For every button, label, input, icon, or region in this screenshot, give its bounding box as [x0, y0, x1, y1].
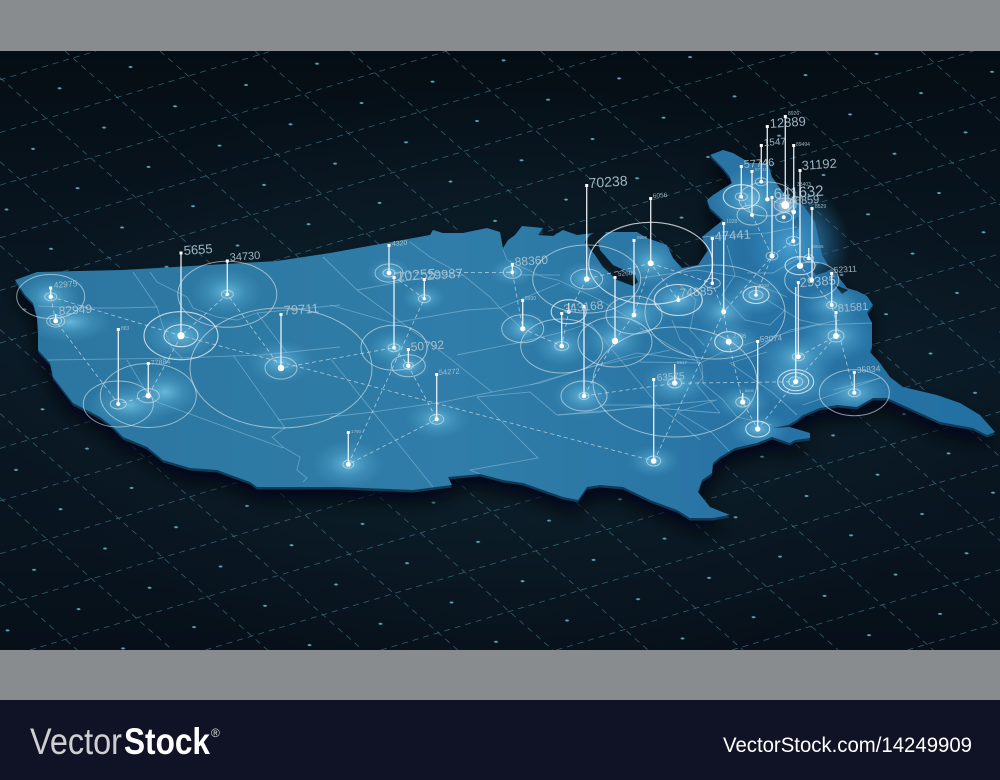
point 70238 [533, 172, 641, 313]
point 8917 [593, 327, 757, 437]
point 70238: 70238 [588, 172, 628, 191]
point 79711 [190, 301, 372, 428]
point 47441: 47441 [714, 227, 751, 244]
point 57746 [723, 157, 775, 209]
point 54272 [430, 367, 460, 424]
point 8529 [785, 204, 839, 298]
point 1790: 1790 [351, 429, 362, 434]
point 52311: 52311 [833, 263, 857, 275]
point 38403 [776, 182, 811, 222]
bottom grey band [0, 650, 1000, 700]
point 46859: 46859 [788, 194, 820, 208]
point 8926 inner ring [739, 182, 796, 216]
northeast glow [734, 183, 850, 307]
point 63575: 63575 [656, 371, 685, 384]
dashed network connections [51, 197, 854, 464]
point 2786: 2786 [733, 334, 747, 340]
point 53074: 53074 [760, 333, 783, 344]
point 74885 [654, 284, 714, 316]
point 60045: 60045 [811, 244, 824, 249]
point 10255: 10255 [396, 265, 436, 284]
point 8520 [743, 283, 770, 304]
point 53074 [746, 333, 783, 437]
map glow spots [20, 166, 894, 488]
point 89494: 89494 [796, 142, 810, 148]
point 12889 [765, 114, 806, 202]
point 82949 [47, 302, 93, 327]
point 81581 [828, 301, 869, 342]
map of the United States [15, 150, 995, 520]
point 47441 [704, 227, 751, 288]
point 29987: 29987 [426, 266, 463, 283]
point 8520: 8520 [759, 283, 770, 288]
coastal inlets [792, 216, 848, 294]
footer bar [0, 700, 1000, 780]
point 8926 [777, 111, 799, 213]
point 63575 [647, 371, 685, 466]
top grey band [0, 0, 1000, 51]
point 343168: 343168 [563, 298, 604, 316]
point 35834: 35834 [856, 363, 881, 375]
point 57746: 57746 [743, 157, 775, 171]
point 81581: 81581 [837, 301, 869, 315]
point 77884: 77884 [151, 359, 171, 367]
point 8917: 8917 [677, 360, 688, 365]
point lower middle ring [561, 305, 607, 411]
point 60045 [804, 244, 824, 262]
point 82949: 82949 [58, 302, 93, 318]
point 79711: 79711 [283, 301, 319, 318]
point 38403: 38403 [797, 182, 811, 188]
logo [30, 721, 220, 762]
point 8909: 8909 [637, 235, 648, 240]
point 641632: 641632 [773, 183, 824, 203]
point 343168 [551, 298, 604, 324]
stock image url: VectorStock.com/14249909 [723, 734, 972, 757]
point 12889: 12889 [769, 114, 806, 131]
logo: Stock [124, 721, 210, 762]
point 8930: 8930 [525, 296, 536, 302]
point 1547: 1547 [763, 136, 787, 149]
point 34730: 34730 [229, 250, 261, 264]
point 8895: 8895 [745, 388, 755, 393]
point 31192 [785, 156, 837, 275]
point 88360 [503, 253, 549, 278]
point 31192: 31192 [801, 156, 837, 173]
point 4320: 4320 [392, 240, 408, 248]
point 10255 [361, 265, 436, 370]
point 42975 [17, 274, 85, 318]
point 5655: 5655 [183, 241, 213, 258]
point 8895 [736, 388, 755, 407]
point 52606: 52606 [618, 270, 637, 278]
point 1790 [343, 429, 362, 468]
point 2786 [715, 332, 747, 352]
point 641632 [766, 183, 824, 260]
point 883: 883 [121, 326, 130, 332]
point 88360: 88360 [514, 253, 549, 269]
point 74885: 74885 [679, 284, 714, 300]
point 50792 [391, 338, 445, 377]
point 89494 [791, 142, 810, 214]
point 42975: 42975 [53, 278, 78, 290]
point 35834 [819, 363, 889, 416]
point 87318: 87318 [755, 167, 768, 172]
point 8909 [606, 235, 662, 334]
data points [17, 111, 889, 468]
point 1547 [755, 136, 787, 186]
dark grid background panel [0, 51, 1000, 650]
logo: Vector [30, 721, 122, 762]
point 34730 [178, 250, 277, 327]
point 6056: 6056 [653, 192, 668, 200]
point 29385 [792, 273, 836, 361]
point 77884 [100, 359, 196, 428]
point 8529: 8529 [815, 204, 826, 210]
point 46859 [786, 194, 820, 246]
point 8930 [502, 296, 544, 343]
lake michigan [585, 229, 638, 286]
logo: ® [211, 726, 220, 740]
point 883 [83, 326, 153, 427]
point 4320 [375, 240, 408, 282]
point 1028: 1028 [726, 219, 737, 225]
point 29385: 29385 [799, 273, 836, 290]
point 87318 [737, 167, 768, 225]
point 52606 [578, 270, 652, 367]
point 29987 [418, 266, 463, 303]
point 50792: 50792 [410, 338, 445, 354]
state borders [38, 227, 880, 487]
point 52311 [827, 263, 857, 308]
point 6056 [589, 192, 713, 304]
point 5655 [144, 241, 218, 360]
point triple rings [778, 287, 814, 394]
point southwest of 343168 [521, 312, 603, 373]
point 1028 [645, 219, 785, 359]
point 8926: 8926 [788, 111, 799, 117]
point 54272: 54272 [439, 367, 460, 377]
